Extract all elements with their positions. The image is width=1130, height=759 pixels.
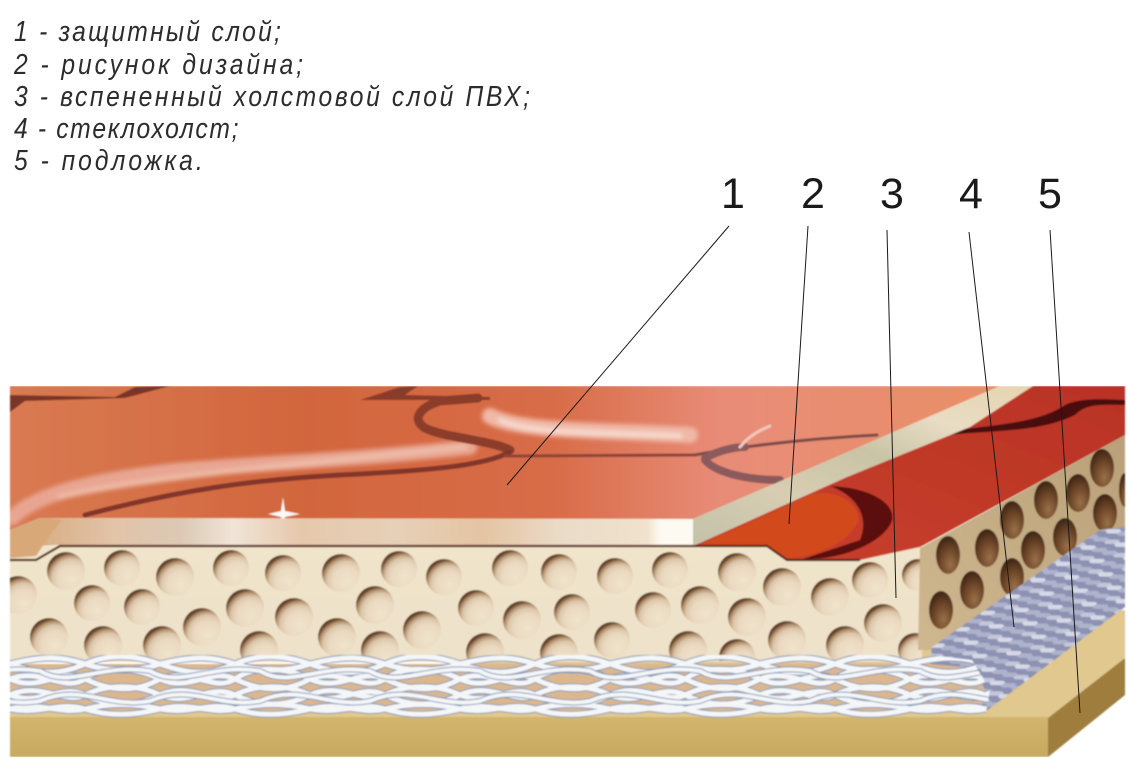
layer 3: foam PVC front face [8, 545, 923, 663]
layer 4: fiberglass mat side [930, 527, 1125, 712]
dark line under layer [10, 546, 860, 560]
leader line 4 [969, 232, 1014, 627]
number labels: 3 [880, 170, 904, 218]
leader line 3 [887, 230, 896, 598]
leader line 5 [1050, 230, 1080, 713]
sparkle [268, 497, 300, 530]
dark curved band [803, 486, 892, 559]
layer 5: backing base [10, 610, 1125, 757]
layer 2: red design layer [695, 386, 1125, 560]
cross-section illustration [0, 386, 1130, 757]
legend text: 3 - вспененный холстовой слой ПВХ; [14, 80, 530, 112]
dark vein in red [945, 399, 1125, 435]
number labels: 4 [959, 170, 983, 218]
legend text: 5 - подложка. [14, 144, 203, 176]
legend text: 4 - стеклохолст; [14, 112, 238, 144]
legend text: 2 - рисунок дизайна; [13, 48, 303, 80]
layer 4: fiberglass mat front braid [10, 655, 990, 718]
S-curve vein [418, 398, 510, 450]
layer 1: protective layer cut edge [10, 386, 1033, 560]
legend text: 1 - защитный слой; [14, 15, 281, 47]
leader line 1 [507, 226, 729, 485]
pale highlight band [12, 416, 690, 518]
layer 3: foam PVC side face [918, 435, 1130, 650]
number labels: 5 [1038, 170, 1062, 218]
layer 1: protective layer top surface [10, 386, 1000, 530]
number labels [721, 170, 1062, 218]
orange leaf [700, 493, 859, 558]
legend text [13, 15, 530, 176]
leader line 2 [789, 226, 808, 524]
number labels: 1 [721, 170, 745, 218]
number labels: 2 [801, 170, 825, 218]
